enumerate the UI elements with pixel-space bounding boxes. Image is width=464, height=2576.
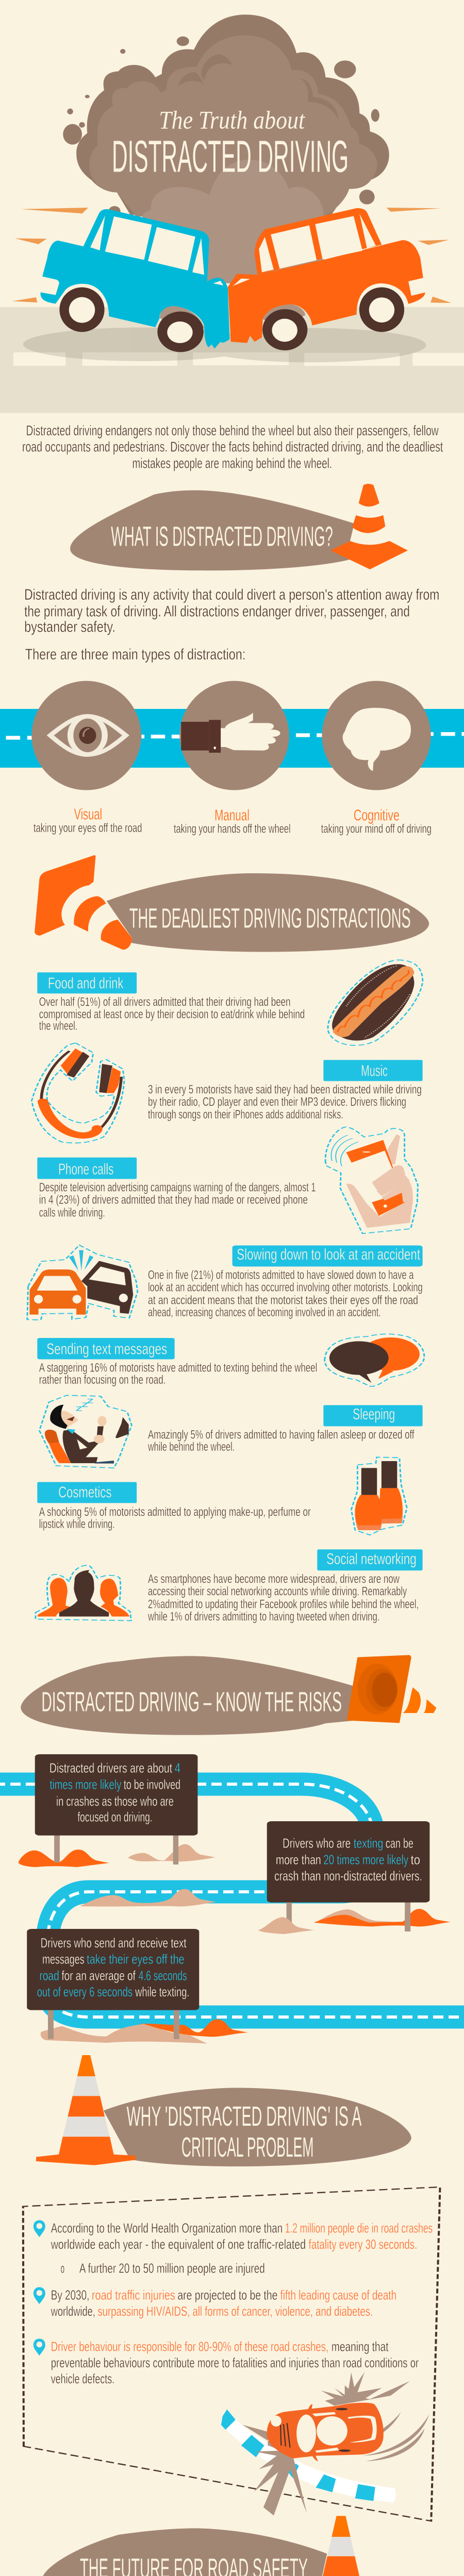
heading banner <box>101 873 429 952</box>
panel: phone calls <box>37 1158 316 1219</box>
sign: distracted drivers 4 times: focused on driving. <box>77 1809 153 1824</box>
icon: manual hand <box>179 681 289 790</box>
section: road signs: Drivers who send and receive text <box>41 1936 187 1951</box>
label: manual <box>174 807 291 836</box>
sign: texting 20 times: texting <box>354 1836 383 1851</box>
panel: music: Music <box>361 1062 388 1079</box>
panel: sleeping: while behind the wheel. <box>148 1440 235 1454</box>
icon: skidding car <box>221 2372 429 2516</box>
sign: distracted drivers 4 times: Distracted drivers are about <box>49 1760 172 1775</box>
icon: sleeping driver: z <box>81 1400 89 1409</box>
fact: by 2030: are projected to be the <box>177 2287 277 2302</box>
sign: eyes off the road <box>27 1929 199 2039</box>
section: road signs <box>19 1754 451 2044</box>
label: cognitive <box>321 807 432 836</box>
fact: driver behaviour: meaning that <box>332 2339 389 2354</box>
sign: texting 20 times <box>267 1821 429 1931</box>
panel: slowing down to look at an accident <box>148 1245 423 1319</box>
sign: eyes off the road: take their eyes off the <box>87 1952 185 1967</box>
heading banner <box>21 1656 355 1735</box>
icon: cone seen from above <box>347 1655 437 1723</box>
panel: social networking <box>147 1549 423 1623</box>
icon: people silhouettes <box>36 1565 131 1621</box>
icon: two cars <box>27 1245 138 1320</box>
section: road signs: while texting. <box>135 1985 189 1999</box>
panel: cosmetics <box>37 1482 311 1531</box>
mounds: beside second sign <box>258 1909 451 1934</box>
section: road signs: in crashes as those who are <box>56 1794 174 1809</box>
panel: sleeping: Sleeping <box>353 1405 395 1423</box>
icon: sleeping driver <box>39 1395 131 1468</box>
heading banner <box>43 2528 327 2576</box>
heading banner <box>104 2088 411 2166</box>
section: crash illustration and future heading <box>43 2372 429 2576</box>
sign: eyes off the road: road <box>39 1968 59 1983</box>
icon: map pin <box>34 2220 45 2237</box>
heading banner <box>70 490 355 570</box>
title: The Truth about <box>159 106 305 134</box>
section: music, phone calls, accident <box>31 1043 423 1319</box>
icon: nail polish bottles <box>351 1457 407 1535</box>
icon: toppled cone <box>35 855 132 950</box>
icon: map pin <box>34 2338 45 2355</box>
panel: food and drink <box>37 972 305 1033</box>
panel: sending text messages: rather than focusing on the road. <box>39 1373 165 1387</box>
sign: distracted drivers 4 times <box>35 1754 197 1865</box>
mound: tan on road <box>80 1889 216 1907</box>
panel: sending text messages <box>37 1338 317 1387</box>
mound: tan <box>128 1844 216 1861</box>
section: three distraction labels and deadliest heading: taking your hands off the wheel <box>174 822 291 836</box>
winding road <box>0 1784 464 2017</box>
icon: traffic cone <box>330 484 408 569</box>
car shadows <box>23 328 426 362</box>
mound: left orange <box>19 1850 109 1867</box>
panel: food and drink: the wheel. <box>39 1019 77 1033</box>
icon: map pin <box>34 2287 45 2304</box>
dashed panel border <box>23 2187 440 2521</box>
fact: driver behaviour <box>34 2338 419 2386</box>
definition text: bystander safety. <box>24 618 115 635</box>
fact: by 2030: By 2030, <box>51 2287 89 2302</box>
fact: world health organization: o <box>61 2261 64 2276</box>
section: social networking and risks heading <box>21 1549 437 1735</box>
fact: by 2030 <box>34 2287 396 2319</box>
section: three distraction labels and deadliest heading: taking your eyes off the road <box>34 821 142 835</box>
icon: upright cone <box>291 2516 390 2576</box>
blue car <box>41 209 229 352</box>
title <box>112 106 349 182</box>
fact: by 2030: road traffic injuries <box>92 2287 175 2302</box>
sign: texting 20 times: Drivers who are <box>283 1836 351 1851</box>
section: sending, sleeping, cosmetics <box>27 1245 424 1535</box>
icon: headphones <box>31 1043 124 1143</box>
section: three distraction labels and deadliest heading <box>34 806 432 1045</box>
orange car <box>228 208 425 350</box>
icon: upright cone <box>36 2055 136 2165</box>
label: cognitive: Cognitive <box>354 807 400 824</box>
label: manual: Manual <box>214 807 250 824</box>
sign: distracted drivers 4 times: to be involved <box>124 1777 180 1792</box>
road surface <box>0 307 464 413</box>
icon: visual eye <box>31 681 141 790</box>
icon: sleeping driver: z <box>75 1403 82 1413</box>
sign: distracted drivers 4 times: 4 <box>175 1760 180 1775</box>
icon: sleeping driver: z <box>87 1396 94 1405</box>
sign: texting 20 times: more than <box>276 1852 321 1867</box>
panel: music <box>148 1060 423 1122</box>
panel: cosmetics: lipstick while driving. <box>39 1517 115 1531</box>
section: why distracted driving is a critical problem <box>23 2055 440 2521</box>
sign: texting 20 times: can be <box>386 1836 413 1851</box>
section: road signs: 4.6 seconds <box>139 1968 187 1983</box>
blue road band <box>0 709 464 768</box>
panel: sending text messages: Sending text messages <box>46 1340 167 1358</box>
label: visual: Visual <box>74 806 102 823</box>
intro text <box>22 423 443 471</box>
panel: phone calls: calls while driving. <box>39 1206 105 1219</box>
panel: sleeping <box>148 1405 423 1454</box>
mounds: beneath third sign <box>41 2019 248 2044</box>
icon: hot dog <box>328 960 423 1045</box>
sign: texting 20 times: to <box>411 1852 420 1867</box>
panel: food and drink: Food and drink <box>48 974 123 992</box>
icon: speech bubbles <box>325 1334 424 1386</box>
sign: distracted drivers 4 times: times more likely <box>49 1777 122 1792</box>
sign: eyes off the road: for an average of <box>61 1968 136 1983</box>
panel: phone calls: Phone calls <box>58 1160 113 1178</box>
fact: driver behaviour: vehicle defects. <box>51 2371 114 2386</box>
hero: crash illustration and title <box>0 14 464 413</box>
label: visual <box>34 806 142 835</box>
fact: world health organization <box>34 2220 433 2276</box>
section: what is distracted driving <box>0 484 464 790</box>
icon: hand holding phone <box>325 1127 418 1233</box>
icon: cognitive brain <box>322 681 431 790</box>
sign: eyes off the road: out of every 6 seconds <box>37 1985 132 1999</box>
impact sparks <box>12 208 451 303</box>
definition text <box>24 586 439 663</box>
fact: by 2030: worldwide, <box>51 2304 95 2319</box>
sign: eyes off the road: messages <box>42 1952 85 1967</box>
smoke cloud <box>63 14 389 283</box>
panel: cosmetics: Cosmetics <box>58 1483 111 1501</box>
